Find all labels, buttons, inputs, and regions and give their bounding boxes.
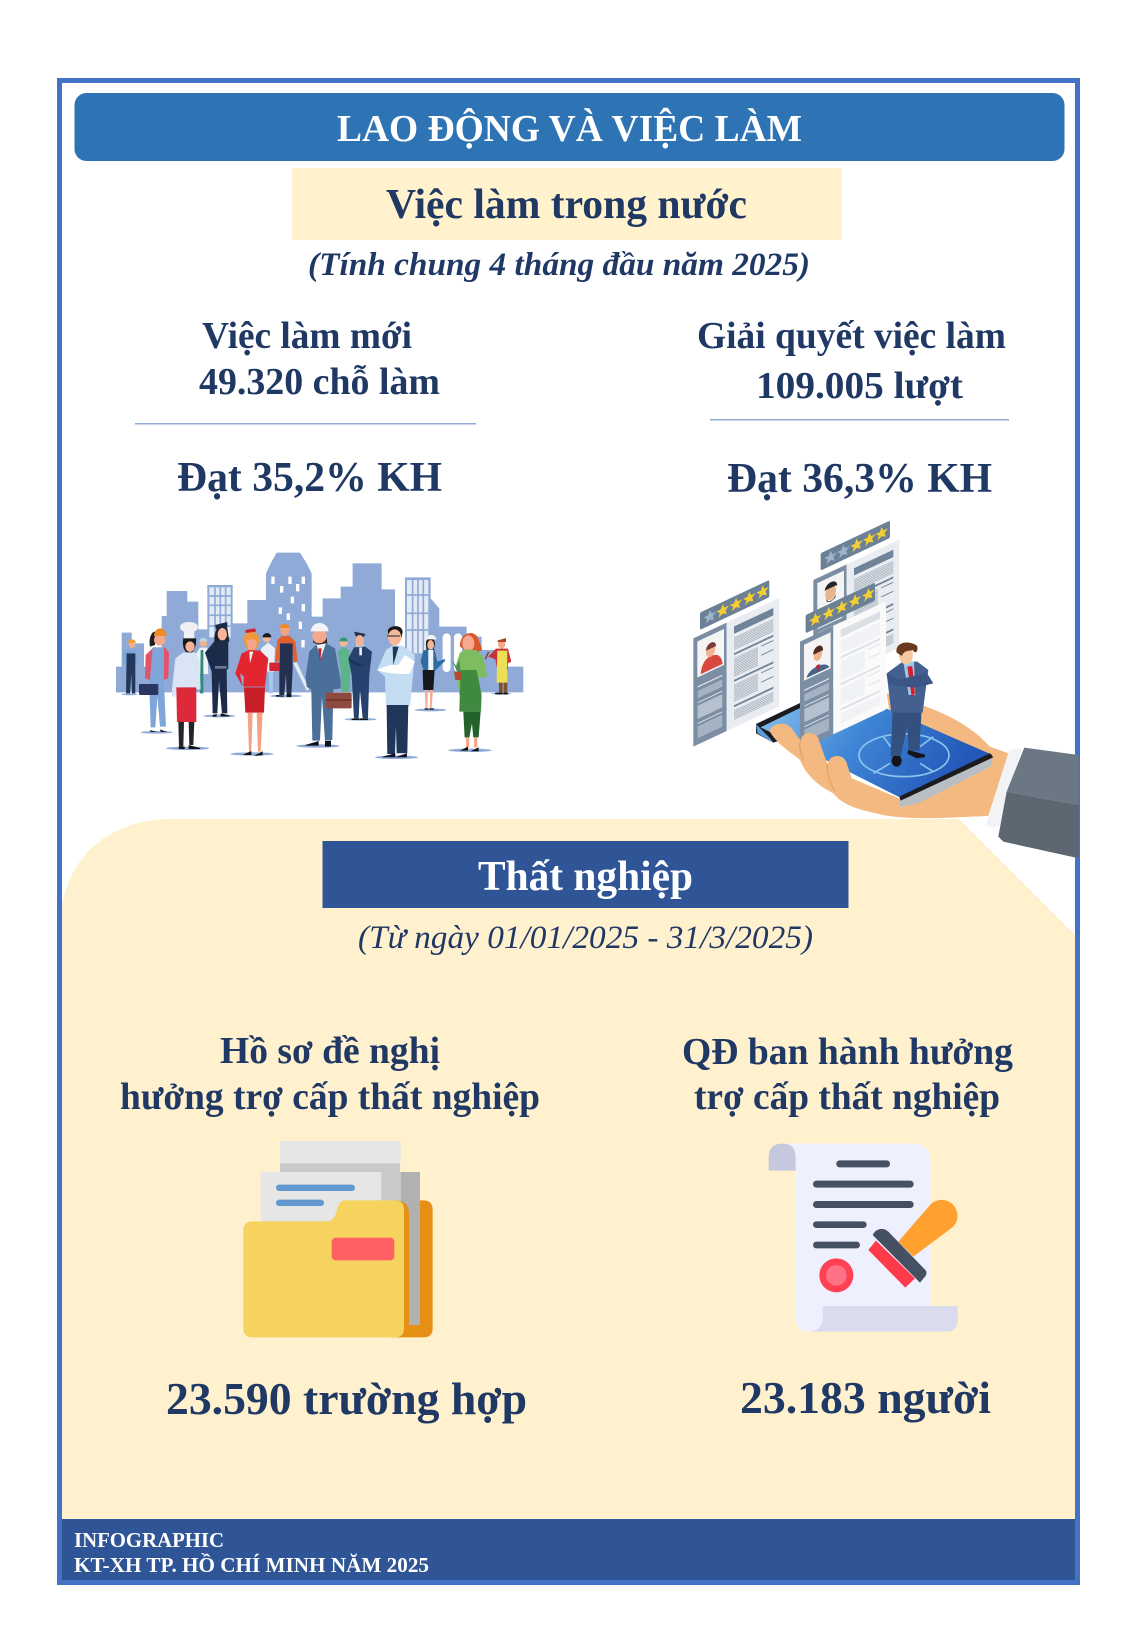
worker: chef xyxy=(172,622,201,749)
worker: small overalls xyxy=(123,639,137,693)
title: LAO ĐỘNG VÀ VIỆC LÀM xyxy=(337,107,802,150)
phone xyxy=(756,684,993,798)
footer text xyxy=(74,1528,429,1577)
stat block: new jobs: Việc làm mới xyxy=(202,315,412,357)
resume card: left xyxy=(693,575,779,747)
worker: engineer in suit xyxy=(305,623,352,747)
resume card: front xyxy=(800,577,886,750)
ground shadows xyxy=(121,693,511,759)
illustration: hand holding phone with resumes xyxy=(693,516,1079,858)
worker: pilot xyxy=(348,632,372,720)
stat heading: applications xyxy=(120,1030,540,1118)
stat heading: decisions xyxy=(682,1031,1013,1118)
stat heading: decisions: QĐ ban hành hưởng xyxy=(682,1031,1013,1073)
hand fingers xyxy=(769,724,990,818)
phone bottom edge over palm xyxy=(900,756,993,807)
worker: woman gardener xyxy=(452,633,487,751)
stat value: applications: 23.590 trường hợp xyxy=(166,1374,527,1424)
stat block: job placement xyxy=(697,315,1009,502)
section heading: domestic jobs xyxy=(292,168,842,240)
resume card: back xyxy=(813,516,899,688)
jacket sleeve xyxy=(998,748,1079,858)
worker: police officer xyxy=(205,622,229,717)
worker: orange overalls xyxy=(269,624,309,697)
stat block: new jobs xyxy=(135,315,476,501)
footer band xyxy=(62,1519,1076,1581)
hand palm behind phone xyxy=(887,693,1008,816)
shirt cuff xyxy=(986,749,1022,827)
worker: painter xyxy=(485,638,511,694)
icon: folder xyxy=(243,1141,433,1337)
title bar xyxy=(74,93,1064,161)
icon: stamped document xyxy=(769,1144,958,1332)
stat heading: applications: hưởng trợ cấp thất nghiệp xyxy=(120,1076,540,1118)
stat block: new jobs: 49.320 chỗ làm xyxy=(199,361,440,403)
illustration: workers and city skyline xyxy=(116,553,523,759)
section heading: unemployment: Thất nghiệp xyxy=(478,854,693,900)
worker: stewardess xyxy=(235,628,268,756)
footer text: INFOGRAPHIC xyxy=(74,1528,224,1552)
stat block: job placement: Đạt 36,3% KH xyxy=(727,456,992,502)
stat heading: applications: Hồ sơ đề nghị xyxy=(220,1030,440,1072)
small doctor behind xyxy=(195,638,208,693)
period note: unemployment: (Từ ngày 01/01/2025 - 31/3/2025) xyxy=(358,920,813,956)
section heading: domestic jobs: Việc làm trong nước xyxy=(386,182,747,228)
stat block: new jobs: Đạt 35,2% KH xyxy=(177,455,442,501)
stat block: job placement: 109.005 lượt xyxy=(756,365,963,407)
man standing on phone xyxy=(887,643,933,767)
worker: woman with clipboard xyxy=(421,635,445,710)
city skyline xyxy=(116,553,523,692)
worker: woman with toolbox xyxy=(139,628,169,732)
stat heading: decisions: trợ cấp thất nghiệp xyxy=(694,1076,1000,1118)
worker: doctor xyxy=(377,626,415,757)
footer text: KT-XH TP. HỒ CHÍ MINH NĂM 2025 xyxy=(74,1553,429,1577)
section heading: unemployment xyxy=(322,841,848,908)
worker: green surgeon xyxy=(338,637,351,692)
stat value: decisions: 23.183 người xyxy=(740,1373,991,1423)
stat block: job placement: Giải quyết việc làm xyxy=(697,315,1006,357)
period note: (Tính chung 4 tháng đầu năm 2025) xyxy=(308,247,810,283)
panel: unemployment background xyxy=(62,819,1076,1519)
worker: white coat behind stewardess xyxy=(261,633,275,693)
